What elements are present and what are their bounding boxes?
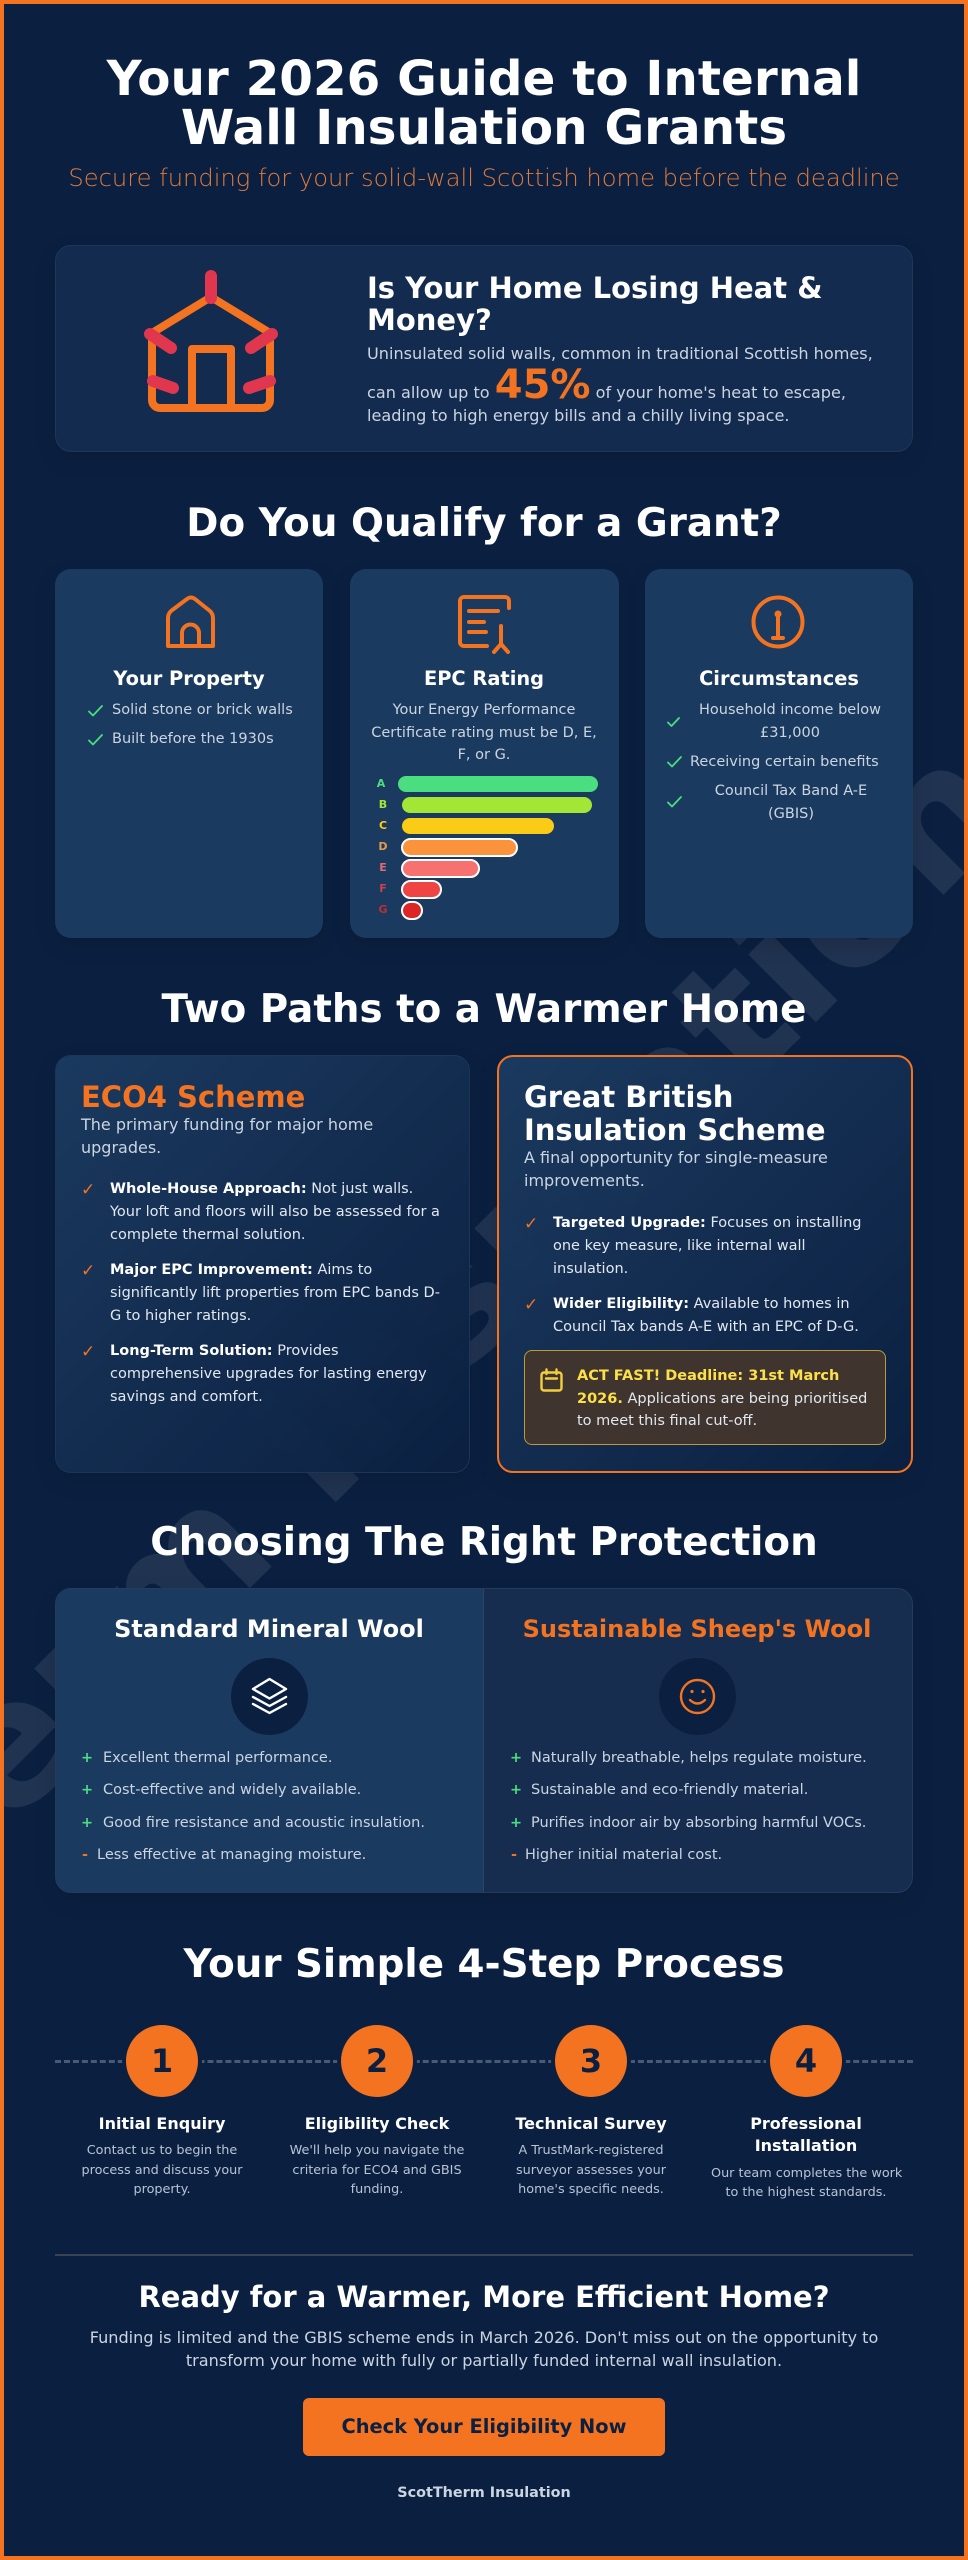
text: deadline: 2026. Applications are being prioritised (577, 1391, 867, 1407)
step 3 text: home's specific needs. (518, 2182, 664, 2197)
footer brand: ScotTherm Insulation (397, 2485, 571, 2501)
list: sheep's wool pros and cons: - (511, 1847, 517, 1863)
step 3 text: surveyor assesses your (516, 2163, 666, 2178)
step 3 text: A TrustMark-registered (518, 2143, 664, 2158)
text: ECO4 summary: upgrades. (81, 1138, 161, 1157)
list: GBIS benefits: one key measure, like internal wall (553, 1238, 806, 1254)
step 2 text: funding. (351, 2182, 403, 2197)
text: ECO4 summary: The primary funding for major home (81, 1115, 373, 1134)
list: ECO4 benefits (81, 1180, 440, 1405)
list: ECO4 benefits: ✓ (81, 1180, 95, 1200)
step 4 text: to the highest standards. (725, 2185, 886, 2200)
list: circumstances criteria: Council Tax Band A-E (715, 783, 867, 799)
list: mineral wool pros and cons: Cost-effective and widely available. (103, 1782, 361, 1798)
heading: protection: Choosing The Right Protection (150, 1520, 818, 1565)
step 4 text: Our team completes the work (711, 2166, 902, 2181)
list: mineral wool pros and cons (81, 1750, 425, 1863)
list: ECO4 benefits: significantly lift properties from EPC bands D- (110, 1285, 440, 1301)
heading: call to action: Ready for a Warmer, More Efficient Home? (138, 2280, 830, 2314)
list: sheep's wool pros and cons: Sustainable and eco-friendly material. (531, 1782, 808, 1798)
chart: epc bands: G (378, 903, 388, 916)
list: GBIS benefits: insulation. (553, 1261, 628, 1277)
button: check eligibility: Check Your Eligibility Now (341, 2415, 627, 2438)
list: mineral wool pros and cons: + (81, 1750, 93, 1766)
heading: sheep's wool: Sustainable Sheep's Wool (523, 1615, 871, 1643)
step 4 text (711, 2114, 902, 2200)
list: ECO4 benefits: Your loft and floors will also be assessed for a (110, 1204, 440, 1220)
icon: home (166, 596, 215, 648)
list: GBIS benefits: Council Tax bands A-E with an EPC of D-G. (553, 1319, 859, 1335)
heading: GBIS: Great British (524, 1080, 733, 1114)
heading: qualify: Do You Qualify for a Grant? (186, 501, 782, 546)
heading: circumstances: Circumstances (699, 667, 859, 690)
heading: ECO4: ECO4 Scheme (81, 1080, 305, 1114)
text: call to action: transform your home with fully or partially funded internal wall insulation. (186, 2351, 782, 2370)
step 4 number (770, 2025, 842, 2097)
panel: insulation comparison (55, 1588, 913, 1893)
list: ECO4 benefits: ✓ (81, 1261, 95, 1281)
list: GBIS benefits: Wider Eligibility: Available to homes in (553, 1296, 850, 1312)
title (106, 51, 861, 156)
step 1 number (126, 2025, 198, 2097)
panel: epc rating (350, 569, 619, 938)
list: sheep's wool pros and cons: Naturally breathable, helps regulate moisture. (531, 1750, 867, 1766)
list: ECO4 benefits: Major EPC Improvement: Aims to (110, 1262, 372, 1278)
process timeline (55, 2025, 913, 2097)
button: check eligibility (303, 2398, 665, 2456)
step 2 number (341, 2025, 413, 2097)
step 2 text (290, 2114, 464, 2197)
heading: losing heat: Money? (367, 303, 492, 337)
list: ECO4 benefits: G to higher ratings. (110, 1308, 251, 1324)
step 1 text: Initial Enquiry (99, 2114, 225, 2133)
panel: heat loss hero (55, 245, 913, 452)
list: sheep's wool pros and cons: + (510, 1782, 522, 1798)
subtitle: Secure funding for your solid-wall Scottish home before the deadline (68, 164, 900, 192)
list: ECO4 benefits: Whole-House Approach: Not just walls. (110, 1181, 413, 1197)
chart: epc bands: D (378, 840, 388, 853)
panel: circumstances (645, 569, 913, 938)
list: GBIS benefits: ✓ (524, 1214, 538, 1234)
text: call to action: Funding is limited and the GBIS scheme ends in March 2026. Don't miss out on the opportunity to (90, 2328, 878, 2347)
step 4 text: Installation (755, 2136, 857, 2155)
callout: deadline (524, 1350, 886, 1445)
list: mineral wool pros and cons: - (82, 1847, 88, 1863)
list: ECO4 benefits: Long-Term Solution: Provides (110, 1343, 338, 1359)
step 4 text: Professional (750, 2114, 862, 2133)
title: Wall Insulation Grants (181, 100, 787, 156)
heading: GBIS (524, 1080, 826, 1147)
icon: house losing heat (144, 270, 278, 412)
list: circumstances criteria (667, 702, 881, 822)
text: heat loss body end: leading to high energy bills and a chilly living space. (367, 406, 790, 425)
list: GBIS benefits: ✓ (524, 1295, 538, 1315)
heading: two paths: Two Paths to a Warmer Home (162, 987, 806, 1032)
list: mineral wool pros and cons: + (81, 1815, 93, 1831)
step 2 text: Eligibility Check (305, 2114, 449, 2133)
step 1 text: process and discuss your (81, 2163, 243, 2178)
icon: info (752, 596, 804, 648)
text: GBIS summary: improvements. (524, 1171, 645, 1190)
list: ECO4 benefits: complete thermal solution. (110, 1227, 306, 1243)
list: circumstances criteria: Household income below (699, 702, 881, 718)
list: property criteria: Solid stone or brick walls (112, 702, 293, 718)
chart: epc bands: E (379, 861, 387, 874)
list: circumstances criteria: £31,000 (760, 725, 820, 741)
step 2 number: 2 (366, 2042, 388, 2080)
text: epc requirement: F, or G. (458, 747, 510, 763)
step 2 text: We'll help you navigate the (290, 2143, 464, 2158)
step 3 text (515, 2114, 667, 2197)
step 2 text: criteria for ECO4 and GBIS (292, 2163, 462, 2178)
stat: 45 percent: can allow up to 45% of your home's heat to escape, (367, 362, 846, 408)
icon: calendar (540, 1368, 563, 1392)
text: ECO4 summary (80, 1115, 373, 1157)
list: circumstances criteria: (GBIS) (768, 806, 814, 822)
text: deadline: ACT FAST! Deadline: 31st March (577, 1368, 839, 1384)
step 1 text: property. (133, 2182, 191, 2197)
chart: epc bands (376, 776, 598, 920)
text: heat loss body: Uninsulated solid walls, common in traditional Scottish homes, (367, 344, 873, 363)
icon: certificate (458, 595, 511, 654)
step 3 number: 3 (580, 2042, 602, 2080)
text: GBIS summary: A final opportunity for single-measure (524, 1148, 828, 1167)
step 3 text: Technical Survey (515, 2114, 667, 2133)
list: mineral wool pros and cons: Less effective at managing moisture. (97, 1847, 366, 1863)
heading: mineral wool: Standard Mineral Wool (114, 1615, 424, 1643)
list: ECO4 benefits: comprehensive upgrades for lasting energy (110, 1366, 427, 1382)
chart: epc bands: F (379, 882, 387, 895)
text: epc requirement: Your Energy Performance (393, 702, 575, 718)
step 4 number: 4 (795, 2042, 817, 2080)
list: sheep's wool pros and cons: + (510, 1815, 522, 1831)
list: GBIS benefits: Targeted Upgrade: Focuses on installing (553, 1215, 861, 1231)
list: circumstances criteria: Receiving certain benefits (690, 754, 879, 770)
icon: layers (231, 1658, 308, 1735)
title: Your 2026 Guide to Internal (107, 51, 861, 107)
step 1 number: 1 (151, 2042, 173, 2080)
text: epc requirement: Certificate rating must be D, E, (371, 725, 597, 741)
text: deadline: to meet this final cut-off. (577, 1413, 757, 1429)
heading: process: Your Simple 4-Step Process (184, 1942, 784, 1987)
panel: ECO4 scheme (55, 1055, 470, 1473)
chart: epc bands: C (379, 819, 387, 832)
text: epc requirement (371, 702, 597, 763)
text: call to action (90, 2328, 878, 2370)
step 1 text: Contact us to begin the (87, 2143, 237, 2158)
list: property criteria: Built before the 1930s (112, 731, 274, 747)
text: deadline (577, 1368, 867, 1429)
list: GBIS benefits (524, 1214, 861, 1335)
list: property criteria (88, 702, 293, 747)
chart: epc bands: B (379, 798, 387, 811)
list: sheep's wool pros and cons: Higher initial material cost. (525, 1847, 722, 1863)
list: sheep's wool pros and cons (510, 1750, 867, 1863)
heading: epc rating: EPC Rating (424, 667, 544, 690)
list: mineral wool pros and cons: Good fire resistance and acoustic insulation. (103, 1815, 425, 1831)
list: mineral wool pros and cons: Excellent thermal performance. (103, 1750, 332, 1766)
heading: losing heat (367, 271, 822, 337)
heading: GBIS: Insulation Scheme (524, 1113, 826, 1147)
list: ECO4 benefits: ✓ (81, 1342, 95, 1362)
panel: great british insulation scheme (497, 1055, 913, 1473)
step 1 text (81, 2114, 243, 2197)
list: mineral wool pros and cons: + (81, 1782, 93, 1798)
step 3 number (555, 2025, 627, 2097)
list: sheep's wool pros and cons: Purifies indoor air by absorbing harmful VOCs. (531, 1815, 866, 1831)
icon: smile (659, 1658, 736, 1735)
chart: epc bands: A (377, 777, 385, 790)
heading: your property: Your Property (113, 667, 265, 690)
list: ECO4 benefits: savings and comfort. (110, 1389, 263, 1405)
list: sheep's wool pros and cons: + (510, 1750, 522, 1766)
text: GBIS summary (524, 1148, 828, 1190)
panel: your property (55, 569, 323, 938)
heading: losing heat: Is Your Home Losing Heat & (367, 271, 822, 305)
